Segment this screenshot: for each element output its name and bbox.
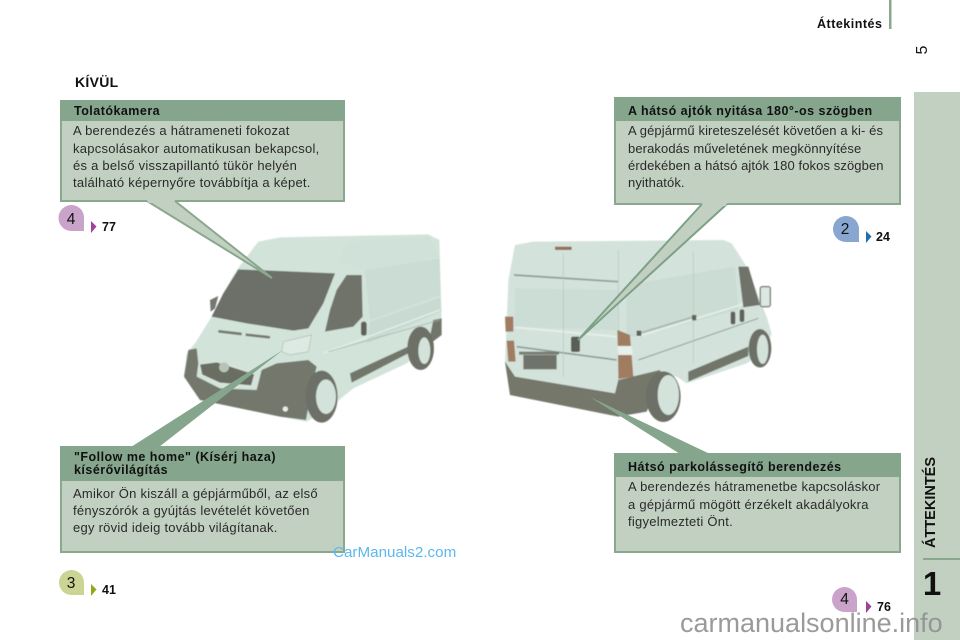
page header	[817, 0, 892, 31]
panel: Hátsó parkolássegítő berendezés: a gépjármű mögött érzékelt akadályokra	[628, 497, 869, 512]
callout pointer	[147, 201, 272, 278]
chapter number: 1	[923, 565, 941, 602]
panel: Hátsó parkolássegítő berendezés	[590, 397, 901, 552]
badge: 4: 4	[67, 211, 76, 228]
chapter label: ÁTTEKINTÉS	[922, 457, 939, 548]
panel: Follow me home: egy rövid ideig tovább világítanak.	[73, 520, 278, 535]
panel: Hátsó parkolássegítő berendezés: A berendezés hátramenetbe kapcsoláskor	[628, 479, 881, 494]
badge: 4: 4	[840, 591, 849, 608]
watermark: carmanualsonline.info: carmanualsonline.info	[680, 608, 943, 638]
badge: 4	[58, 205, 84, 231]
callout pointer	[578, 204, 727, 340]
watermark: CarManuals2.com: CarManuals2.com	[333, 544, 456, 561]
page number: 5	[914, 46, 931, 54]
badge: 2: 2	[841, 221, 849, 238]
page reference: 77: 77	[102, 220, 116, 234]
page reference: 76	[866, 600, 891, 614]
panel: Tolatókamera: Tolatókamera	[74, 104, 161, 118]
page reference: 77	[91, 220, 116, 234]
panel: Follow me home: kísérővilágítás	[74, 463, 168, 477]
panel: A hátsó ajtók nyitása	[578, 97, 901, 340]
panel: Hátsó parkolássegítő berendezés: Hátsó parkolássegítő berendezés	[628, 460, 842, 474]
panel: Follow me home: "Follow me home" (Kísérj haza)	[74, 450, 276, 464]
section title: KÍVÜL	[75, 74, 119, 90]
panel: Follow me home: Amikor Ön kiszáll a gépjárműből, az első	[73, 486, 318, 501]
illustration: van front view	[184, 234, 442, 423]
badge: 3	[59, 570, 84, 595]
panel: A hátsó ajtók nyitása: A gépjármű kireteszelését követően a ki- és	[628, 123, 883, 138]
callout pointer	[131, 350, 283, 447]
panel: A hátsó ajtók nyitása: berakodás műveletének megkönnyítése	[628, 141, 861, 156]
panel: Hátsó parkolássegítő berendezés: figyelmezteti Önt.	[628, 514, 733, 529]
panel: Tolatókamera: található képernyőre továbbítja a képet.	[73, 175, 311, 190]
sidebar tab	[914, 92, 960, 640]
callout pointer	[590, 397, 710, 454]
page reference: 76: 76	[877, 600, 891, 614]
page reference: 24: 24	[876, 230, 890, 244]
badge: 2	[833, 216, 859, 242]
panel: A hátsó ajtók nyitása: A hátsó ajtók nyitása 180°-os szögben	[628, 104, 873, 118]
illustration: van rear view	[505, 240, 772, 422]
badge: 4	[832, 587, 857, 612]
panel: A hátsó ajtók nyitása: érdekében a hátsó ajtók 180 fokos szögben	[628, 158, 884, 173]
page header: Áttekintés	[817, 16, 882, 31]
panel: Follow me home: fényszórók a gyújtás levételét követően	[73, 503, 310, 518]
panel: Tolatókamera	[60, 100, 345, 278]
panel: Tolatókamera: és a belső visszapillantó tükör helyén	[73, 158, 297, 173]
page reference: 41: 41	[102, 583, 116, 597]
panel: Tolatókamera: kapcsolásakor automatikusan bekapcsol,	[73, 141, 320, 156]
panel: Tolatókamera: A berendezés a hátrameneti fokozat	[73, 123, 290, 138]
panel: A hátsó ajtók nyitása: nyithatók.	[628, 175, 685, 190]
page reference: 24	[866, 230, 890, 244]
panel: Follow me home	[60, 350, 345, 552]
badge: 3: 3	[67, 575, 75, 592]
page reference: 41	[91, 583, 116, 597]
